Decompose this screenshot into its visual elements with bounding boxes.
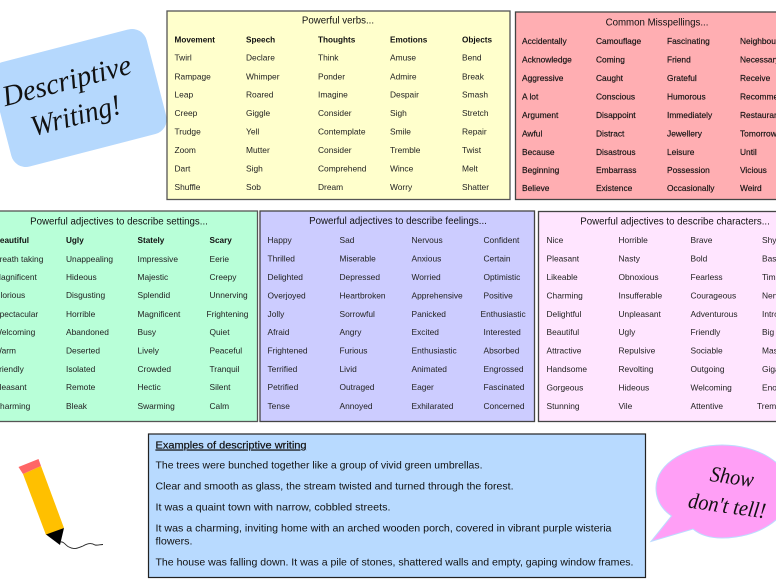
- column: feelings 2: Sorrowful: [340, 309, 375, 319]
- column: feelings 2: Heartbroken: [340, 290, 386, 300]
- column: emotions: Admire: [390, 72, 417, 82]
- column: misspellings 3: Occasionally: [667, 183, 715, 193]
- column: scary: Eerie: [210, 254, 229, 264]
- column: feelings 4: Confident: [484, 235, 520, 245]
- column: characters 1: Beautiful: [546, 327, 579, 337]
- column: ugly: Isolated: [66, 364, 96, 374]
- column: misspellings 2: Camouflage: [596, 36, 642, 46]
- column: feelings 3: Eager: [412, 382, 434, 392]
- column: feelings 3: Apprehensive: [412, 290, 463, 300]
- column: feelings 1: Petrified: [268, 382, 299, 392]
- column: characters 3: Sociable: [690, 346, 723, 356]
- heading: common misspellings: Common Misspellings...: [606, 18, 708, 28]
- column: stately: Splendid: [138, 290, 170, 300]
- column: misspellings 4: Weird: [740, 183, 762, 193]
- column: stately: Busy: [138, 327, 157, 337]
- column: thoughts: Think: [318, 52, 339, 62]
- column: misspellings 2: Conscious: [596, 92, 635, 102]
- column: feelings 2: Miserable: [340, 254, 376, 264]
- column: feelings 4: Certain: [484, 254, 511, 264]
- column: misspellings 1: A lot: [522, 92, 539, 102]
- callout: show don't tell speech bubble: don't tell!: [687, 488, 768, 523]
- column: stately: Crowded: [138, 364, 171, 374]
- column: characters 1: Likeable: [546, 272, 578, 282]
- column: feelings 3: Panicked: [412, 309, 446, 319]
- column: thoughts: Imagine: [318, 90, 348, 100]
- column: stately: Majestic: [138, 272, 168, 282]
- column: feelings 4: Absorbed: [484, 346, 520, 356]
- example: trees: The trees were bunched together like a group of vivid green umbrellas.: [156, 460, 482, 472]
- panel: adjectives for settings: [0, 211, 258, 422]
- column: misspellings 1: Awful: [522, 128, 542, 138]
- column: characters 1: Stunning: [546, 401, 580, 411]
- column: characters 2: Hideous: [618, 382, 649, 392]
- column: movement: Rampage: [174, 72, 211, 82]
- column: misspellings 2: Disappoint: [596, 110, 636, 120]
- example: charming home: It was a charming, inviting home with an arched wooden porch, covered in vibrant purple wisteria: [156, 524, 612, 534]
- column: characters 3: Adventurous: [690, 309, 738, 319]
- column: scary: Unnerving: [210, 290, 248, 300]
- column: characters 2: Obnoxious: [618, 272, 659, 282]
- column: scary: Quiet: [210, 327, 230, 337]
- column: movement: Shuffle: [174, 182, 201, 192]
- column: thoughts: Contemplate: [318, 126, 366, 136]
- column: feelings 3: Exhilarated: [412, 401, 454, 411]
- column: feelings 4: Concerned: [484, 401, 525, 411]
- column: objects: Smash: [462, 90, 488, 100]
- column: emotions: Wince: [390, 164, 414, 174]
- column: scary: Silent: [210, 382, 231, 392]
- column: objects: Twist: [462, 145, 482, 155]
- column: objects: Objects: [462, 36, 492, 44]
- title card: Descriptive Writing: [0, 26, 170, 170]
- column: feelings 3: Anxious: [412, 254, 441, 264]
- column: characters 2: Horrible: [618, 235, 648, 245]
- example: charming home: flowers.: [156, 536, 192, 548]
- example: falling house: The house was falling down. It was a pile of stones, shattered walls and empty, gaping window frames.: [156, 558, 634, 568]
- column: stately: Swarming: [138, 401, 175, 411]
- column: ugly: Disgusting: [66, 290, 105, 300]
- column: feelings 2: Furious: [340, 346, 367, 356]
- column: misspellings 4: Receive: [740, 73, 771, 83]
- column: characters 3: Brave: [690, 235, 713, 245]
- heading: examples: Examples of descriptive writing: [156, 440, 307, 452]
- example: stream: Clear and smooth as glass, the stream twisted and turned through the forest.: [156, 482, 514, 492]
- column: feelings 1: Tense: [268, 401, 290, 411]
- column: feelings 4: Enthusiastic: [480, 309, 526, 319]
- column: speech: Roared: [246, 90, 274, 100]
- heading: characters adjectives: Powerful adjectives to describe characters...: [580, 216, 770, 228]
- title card: Descriptive Writing: Descriptive: [0, 49, 135, 113]
- column: feelings 1: Terrified: [268, 364, 298, 374]
- column: emotions: Emotions: [390, 36, 428, 44]
- column: misspellings 2: Coming: [596, 54, 625, 64]
- column: feelings 4: Engrossed: [484, 364, 524, 374]
- column: emotions: Worry: [390, 182, 413, 192]
- column: ugly: Hideous: [66, 272, 97, 282]
- column: ugly: Unappealing: [66, 254, 113, 264]
- column: misspellings 3: Jewellery: [667, 128, 703, 138]
- column: stately: Hectic: [138, 382, 161, 392]
- column: misspellings 4: Tomorrow: [740, 128, 776, 138]
- column: speech: Giggle: [246, 108, 271, 118]
- icon: pencil with squiggle: [18, 459, 103, 549]
- column: misspellings 1: Acknowledge: [522, 54, 572, 64]
- column: speech: Sigh: [246, 164, 263, 174]
- column: misspellings 3: Grateful: [667, 73, 697, 83]
- column: thoughts: Consider: [318, 108, 352, 118]
- column: scary: Scary: [210, 236, 232, 245]
- column: feelings 2: Depressed: [340, 272, 380, 282]
- column: feelings 4: Positive: [484, 290, 513, 300]
- column: emotions: Despair: [390, 90, 419, 100]
- column: movement: Movement: [174, 36, 215, 44]
- column: feelings 2: Angry: [340, 327, 362, 337]
- panel: examples of descriptive writing: [148, 434, 646, 578]
- column: characters 2: Insufferable: [618, 290, 662, 300]
- column: movement: Leap: [174, 90, 193, 100]
- column: feelings 1: Overjoyed: [268, 290, 306, 300]
- column: misspellings 3: Immediately: [667, 110, 713, 120]
- title card: Descriptive Writing: Writing!: [27, 89, 124, 143]
- column: ugly: Ugly: [66, 236, 84, 245]
- column: feelings 3: Nervous: [412, 235, 443, 245]
- column: feelings 4: Interested: [484, 327, 521, 337]
- column: emotions: Smile: [390, 126, 411, 136]
- column: objects: Break: [462, 72, 485, 82]
- column: misspellings 1: Beginning: [522, 165, 560, 175]
- column: misspellings 3: Fascinating: [667, 36, 710, 46]
- column: stately: Magnificent: [138, 309, 181, 319]
- column: emotions: Sigh: [390, 108, 407, 118]
- column: characters 2: Ugly: [618, 327, 636, 337]
- column: movement: Dart: [174, 164, 191, 174]
- column: objects: Repair: [462, 126, 487, 136]
- column: characters 3: Fearless: [690, 272, 723, 282]
- column: stately: Impressive: [138, 254, 178, 264]
- panel: adjectives for feelings: [260, 211, 534, 422]
- column: speech: Speech: [246, 36, 275, 44]
- column: misspellings 1: Accidentally: [522, 36, 568, 46]
- column: ugly: Horrible: [66, 309, 96, 319]
- column: ugly: Deserted: [66, 346, 100, 356]
- column: characters 2: Revolting: [618, 364, 654, 374]
- column: scary: Peaceful: [210, 346, 242, 356]
- column: characters 1: Delightful: [546, 309, 582, 319]
- column: characters 1: Handsome: [546, 364, 587, 374]
- column: misspellings 3: Friend: [667, 54, 691, 64]
- column: misspellings 2: Distract: [596, 128, 625, 138]
- heading: powerful verbs: Powerful verbs...: [302, 16, 374, 26]
- column: speech: Yell: [246, 126, 259, 136]
- column: feelings 2: Outraged: [340, 382, 375, 392]
- column: thoughts: Ponder: [318, 72, 345, 82]
- column: movement: Trudge: [174, 126, 201, 136]
- column: scary: Frightening: [206, 309, 249, 319]
- column: feelings 2: Sad: [340, 235, 355, 245]
- column: feelings 1: Afraid: [268, 327, 290, 337]
- column: characters 2: Repulsive: [618, 346, 656, 356]
- column: emotions: Tremble: [390, 145, 421, 155]
- callout: show don't tell speech bubble: Show: [709, 461, 756, 492]
- column: characters 1: Nice: [546, 235, 564, 245]
- callout: show don't tell speech bubble: [651, 445, 776, 542]
- column: feelings 1: Jolly: [268, 309, 285, 319]
- column: feelings 4: Optimistic: [484, 272, 520, 282]
- column: misspellings 4: Until: [740, 147, 757, 157]
- column: feelings 1: Happy: [268, 235, 293, 245]
- column: objects: Bend: [462, 52, 482, 62]
- column: misspellings 4: Vicious: [740, 165, 767, 175]
- column: feelings 3: Enthusiastic: [412, 346, 457, 356]
- column: misspellings 2: Caught: [596, 73, 624, 83]
- panel: adjectives for characters: [538, 212, 776, 422]
- heading: settings adjectives: Powerful adjectives to describe settings...: [30, 216, 208, 228]
- column: misspellings 1: Argument: [522, 110, 559, 120]
- column: speech: Sob: [246, 182, 261, 192]
- column: characters 3: Bold: [690, 254, 708, 264]
- heading: feelings adjectives: Powerful adjectives to describe feelings...: [309, 216, 487, 227]
- column: characters 3: Outgoing: [690, 364, 725, 374]
- column: misspellings 1: Aggressive: [522, 73, 564, 83]
- column: feelings 2: Annoyed: [340, 401, 373, 411]
- column: feelings 1: Thrilled: [268, 254, 295, 264]
- column: misspellings 1: Believe: [522, 183, 550, 193]
- column: misspellings 2: Embarrass: [596, 165, 636, 175]
- column: characters 1: Attractive: [546, 346, 582, 356]
- column: speech: Whimper: [246, 72, 280, 82]
- column: misspellings 3: Possession: [667, 165, 710, 175]
- column: characters 2: Unpleasant: [618, 309, 662, 319]
- column: stately: Stately: [138, 236, 165, 245]
- column: misspellings 3: Leisure: [667, 147, 695, 157]
- column: movement: Creep: [174, 108, 198, 118]
- column: ugly: Bleak: [66, 401, 88, 411]
- column: scary: Calm: [210, 401, 229, 411]
- column: movement: Twirl: [174, 52, 192, 62]
- column: feelings 3: Animated: [412, 364, 447, 374]
- column: feelings 1: Delighted: [268, 272, 303, 282]
- column: feelings 2: Livid: [340, 364, 357, 374]
- column: movement: Zoom: [174, 145, 196, 155]
- column: ugly: Remote: [66, 382, 96, 392]
- column: misspellings 3: Humorous: [667, 92, 706, 102]
- panel: common misspellings: [516, 12, 776, 200]
- column: emotions: Amuse: [390, 52, 416, 62]
- column: characters 3: Attentive: [690, 401, 723, 411]
- example: town: It was a quaint town with narrow, cobbled streets.: [156, 502, 390, 514]
- column: characters 2: Nasty: [618, 254, 641, 264]
- column: characters 3: Friendly: [690, 327, 721, 337]
- column: characters 2: Vile: [618, 401, 633, 411]
- column: feelings 3: Worried: [412, 272, 441, 282]
- column: thoughts: Consider: [318, 145, 352, 155]
- column: ugly: Abandoned: [66, 327, 109, 337]
- column: objects: Melt: [462, 164, 478, 174]
- column: scary: Creepy: [210, 272, 237, 282]
- column: stately: Lively: [138, 346, 160, 356]
- column: characters 3: Welcoming: [690, 382, 732, 392]
- column: characters 4: Big: [762, 327, 774, 337]
- column: feelings 3: Excited: [412, 327, 439, 337]
- column: objects: Stretch: [462, 108, 489, 118]
- column: characters 3: Courageous: [690, 290, 736, 300]
- column: speech: Mutter: [246, 145, 270, 155]
- column: feelings 1: Frightened: [268, 346, 308, 356]
- column: thoughts: Thoughts: [318, 36, 356, 44]
- column: thoughts: Comprehend: [318, 164, 367, 174]
- column: characters 1: Gorgeous: [546, 382, 583, 392]
- column: speech: Declare: [246, 52, 275, 62]
- column: characters 1: Charming: [546, 290, 583, 300]
- column: characters 1: Pleasant: [546, 254, 580, 264]
- column: misspellings 1: Because: [522, 147, 555, 157]
- column: misspellings 2: Existence: [596, 183, 633, 193]
- column: misspellings 2: Disastrous: [596, 147, 636, 157]
- panel: powerful verbs: [167, 11, 510, 200]
- column: scary: Tranquil: [210, 364, 240, 374]
- column: feelings 4: Fascinated: [484, 382, 525, 392]
- column: thoughts: Dream: [318, 182, 343, 192]
- column: objects: Shatter: [462, 182, 489, 192]
